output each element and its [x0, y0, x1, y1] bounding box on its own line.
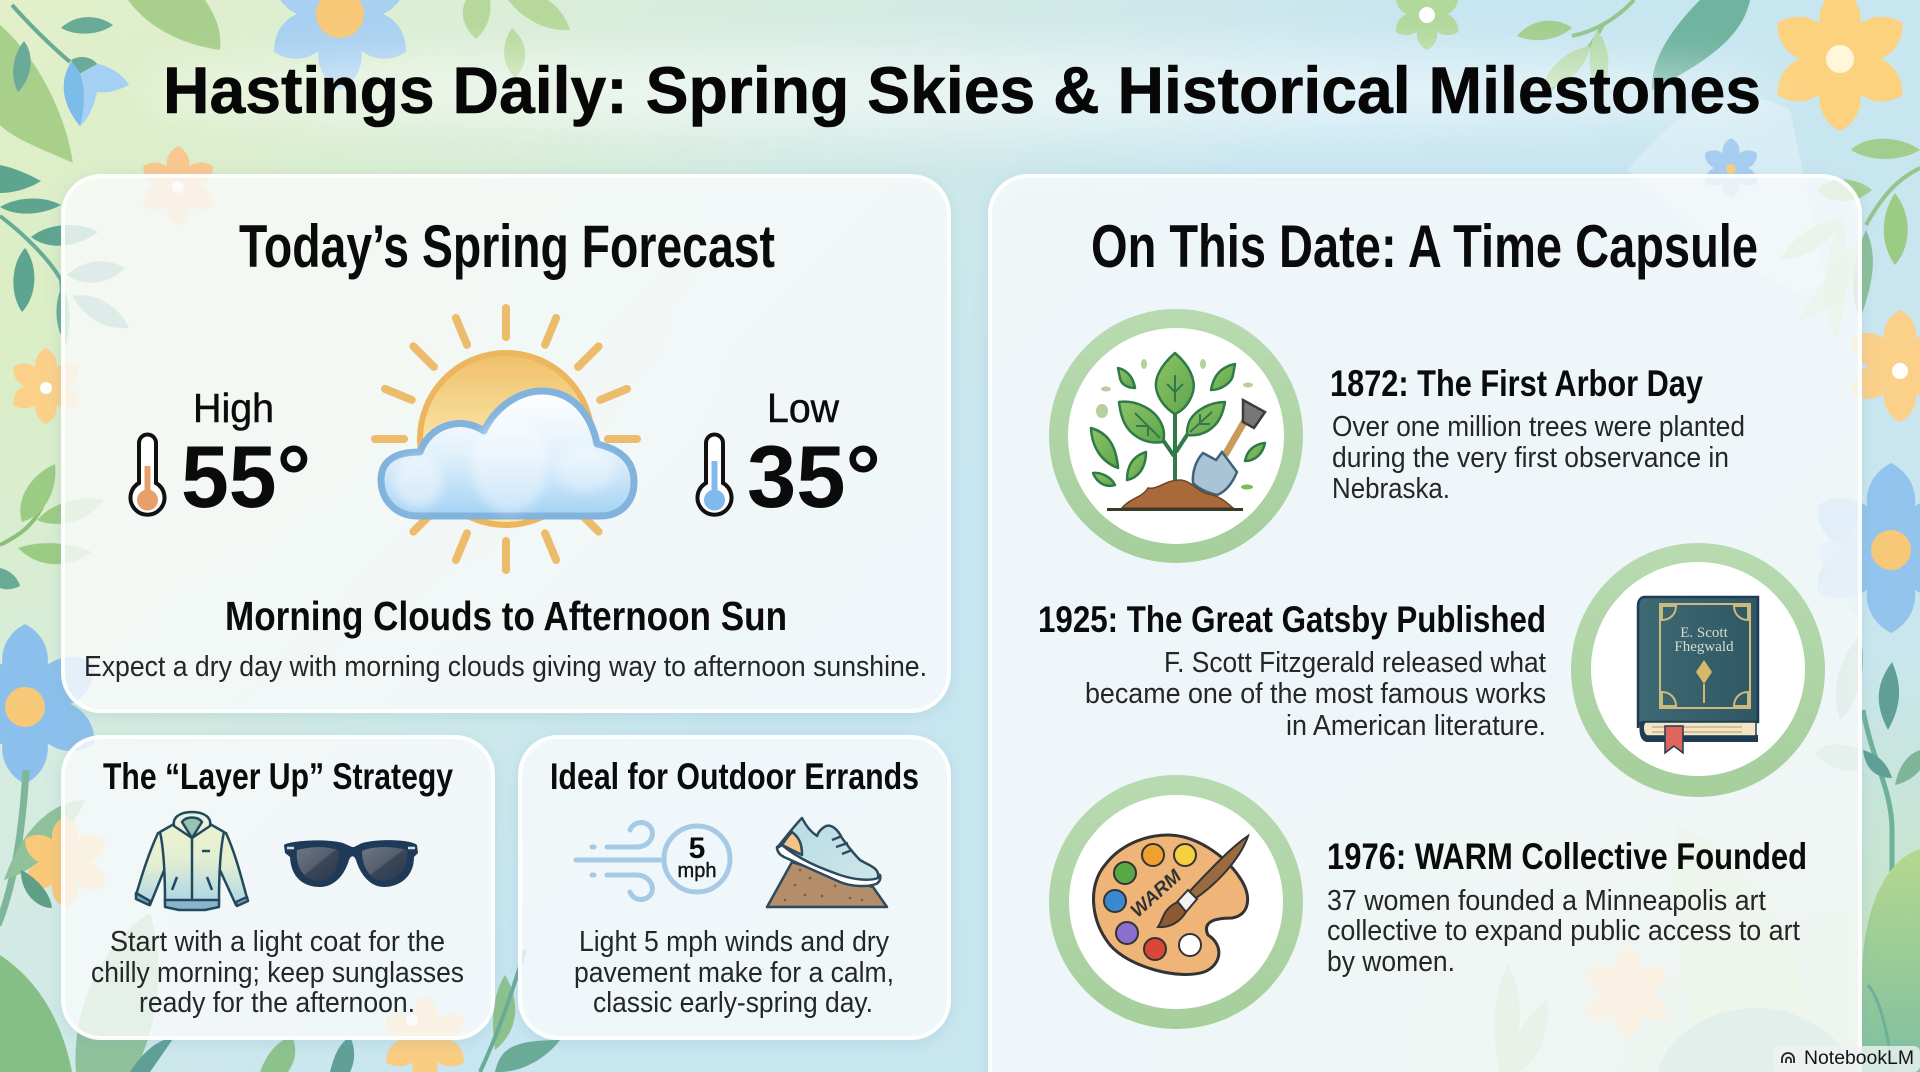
1872 description: during the very first observance in [1332, 442, 1729, 474]
small blue flower [1701, 138, 1761, 198]
thermometer icon: high [130, 435, 164, 515]
panel: ideal for outdoor errands [520, 737, 949, 1038]
icon: book in green ring: Fhegwald [1674, 639, 1734, 655]
item: 1872 arbor day [1049, 309, 1745, 563]
time capsule heading: On This Date: A Time Capsule [1091, 213, 1758, 280]
1976 description: by women. [1327, 946, 1455, 978]
1976 heading: 1976: WARM Collective Founded [1327, 836, 1807, 877]
high temperature: 55° [181, 427, 311, 526]
faded peach flower [138, 146, 218, 226]
thermometer icon: low [697, 435, 732, 515]
low label: Low [767, 385, 839, 431]
left orange flower [8, 348, 84, 424]
right blue flower [1805, 463, 1920, 633]
1872 heading: 1872: The First Arbor Day [1330, 363, 1703, 404]
icon: walking shoe on pavement [767, 818, 887, 907]
1976 description: 37 women founded a Minneapolis art [1327, 885, 1766, 917]
icon: sunglasses [284, 840, 418, 887]
forecast subheading: Morning Clouds to Afternoon Sun [225, 593, 787, 639]
panel: layer up strategy [63, 737, 493, 1038]
panel: on this date time capsule [990, 176, 1860, 1072]
layer up description [91, 926, 464, 1019]
1872 description [1332, 411, 1745, 505]
weather icon: sun behind cloud [375, 308, 637, 570]
1976 description: collective to expand public access to art [1327, 915, 1800, 947]
icon: wind speed: mph [678, 860, 716, 882]
icon: jacket [136, 812, 248, 910]
1872 description: Nebraska. [1332, 473, 1450, 505]
1925 description: F. Scott Fitzgerald released what [1164, 647, 1546, 679]
icon: artist palette in green ring [1049, 775, 1303, 1029]
1925 description: in American literature. [1286, 710, 1546, 742]
right stems and big leaf [1862, 662, 1920, 1072]
layer up description: Start with a light coat for the [110, 926, 445, 958]
errands description: classic early-spring day. [593, 987, 873, 1019]
layer up description: chilly morning; keep sunglasses [91, 957, 464, 989]
icon: wind speed: 5 [689, 832, 705, 865]
left green leaves [0, 464, 104, 589]
top-left leaves [0, 0, 570, 163]
top-right foliage [1391, 0, 1750, 95]
layer up description: ready for the afternoon. [139, 987, 415, 1019]
1872 description: Over one million trees were planted [1332, 411, 1745, 443]
watermark: NotebookLM [1773, 1046, 1920, 1072]
right leaves [1780, 139, 1920, 320]
errands description: Light 5 mph winds and dry [579, 926, 889, 958]
layer up heading: The “Layer Up” Strategy [103, 756, 453, 797]
title glow [140, 50, 1780, 134]
errands heading: Ideal for Outdoor Errands [550, 756, 919, 797]
1925 description: became one of the most famous works [1085, 678, 1546, 710]
top blue flower [263, 0, 417, 90]
errands description: pavement make for a calm, [574, 957, 894, 989]
forecast heading: Today’s Spring Forecast [239, 213, 775, 280]
icon: book in green ring [1571, 543, 1825, 797]
1925 description [1085, 647, 1546, 742]
lower-left stems and orange flower [0, 770, 295, 1072]
watermark: NotebookLM: NotebookLM [1804, 1048, 1914, 1069]
low temperature: 35° [747, 427, 881, 526]
right orange flower [1844, 310, 1920, 422]
item: 1925 great gatsby [1038, 543, 1825, 797]
high label: High [193, 385, 274, 431]
title: Hastings Daily: Spring Skies & Historical Milestones [163, 53, 1761, 127]
icon: artist palette in green ring: WARM [1127, 865, 1187, 922]
1976 description [1327, 885, 1800, 978]
icon: sapling and shovel in green ring [1049, 309, 1303, 563]
top-right yellow flower [1767, 0, 1913, 131]
forecast description: Expect a dry day with morning clouds giving way to afternoon sunshine. [84, 651, 927, 683]
foliage behind the right panel [1495, 218, 1908, 1072]
lower-left blue flower [0, 624, 106, 784]
errands description [574, 926, 894, 1019]
item: 1976 warm collective [1049, 775, 1807, 1029]
panel: today's spring forecast [63, 176, 949, 711]
1925 heading: 1925: The Great Gatsby Published [1038, 599, 1546, 640]
icon: wind speed [576, 822, 730, 900]
blue bell flower [64, 57, 129, 126]
left teal branch [0, 165, 129, 345]
icon: book in green ring: E. Scott [1680, 625, 1729, 641]
bottom-centre foliage [330, 950, 560, 1072]
